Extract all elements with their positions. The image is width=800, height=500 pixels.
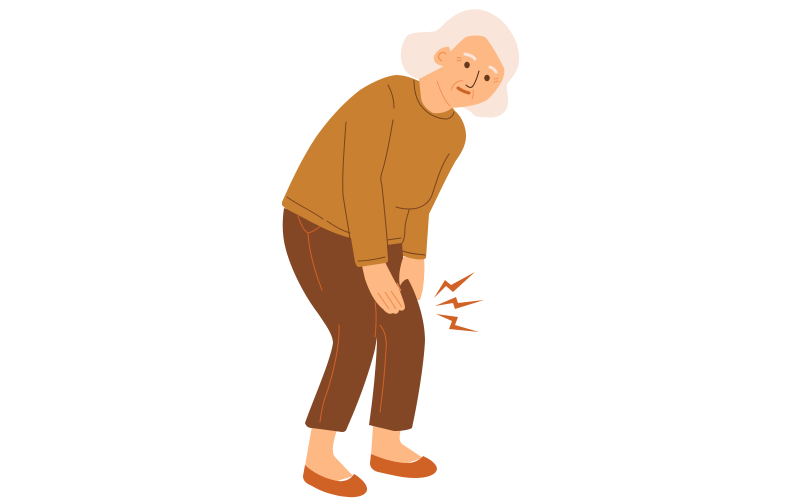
right shoe xyxy=(370,454,437,478)
bolt: top xyxy=(434,272,475,298)
nose xyxy=(466,71,479,87)
mouth xyxy=(458,88,469,93)
head xyxy=(434,36,504,108)
trouser seams xyxy=(298,216,386,422)
sweater fold lines xyxy=(287,80,454,261)
eyebrows xyxy=(465,54,475,59)
neck xyxy=(419,62,462,113)
front hand xyxy=(362,262,405,314)
left foot xyxy=(305,426,353,485)
trousers xyxy=(283,208,425,432)
back hand xyxy=(397,257,424,300)
face xyxy=(442,36,504,108)
bolt: middle xyxy=(435,297,484,309)
left shoe xyxy=(303,465,367,497)
hair xyxy=(401,9,519,118)
pain bolts xyxy=(434,272,484,332)
sweater xyxy=(282,75,466,267)
wrinkles xyxy=(437,58,498,106)
ear xyxy=(434,47,452,66)
eyes xyxy=(464,62,470,68)
right foot xyxy=(371,426,423,470)
finger lines xyxy=(378,283,402,309)
bolt: bottom xyxy=(436,314,479,332)
